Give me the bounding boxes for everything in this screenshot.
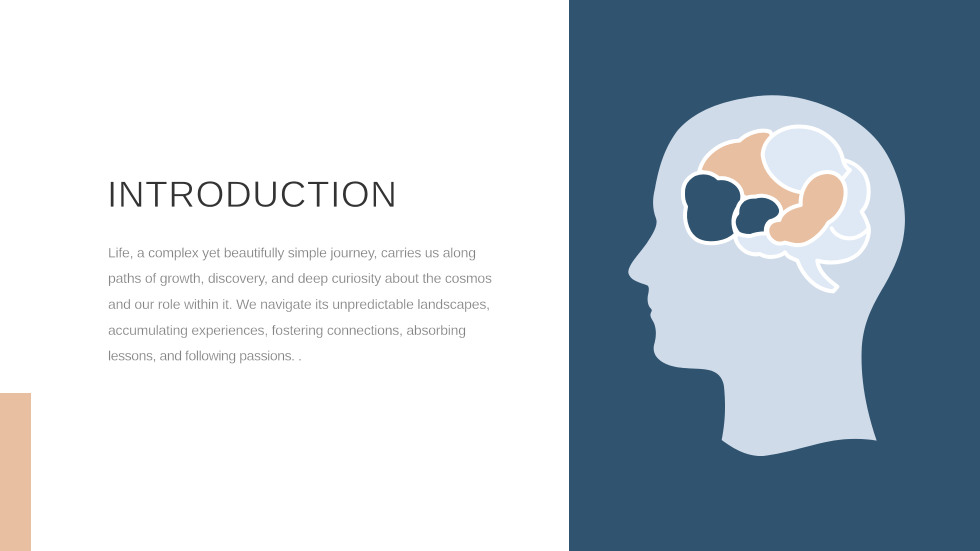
brain dark small lobe bbox=[734, 196, 781, 236]
accent bar bbox=[0, 393, 31, 551]
head silhouette bbox=[628, 95, 905, 456]
brain dark front lobe bbox=[683, 172, 742, 243]
brain top light lobe bbox=[763, 127, 850, 192]
illustration: head with brain bbox=[628, 95, 905, 456]
body text: Life, a complex yet beautifully simple journey, carries us along bbox=[108, 244, 476, 260]
brain peach lobe bbox=[699, 131, 807, 223]
body text: lessons, and following passions. . bbox=[108, 348, 302, 364]
brain lower right lobe line bbox=[832, 228, 867, 238]
body text: paths of growth, discovery, and deep curiosity about the cosmos bbox=[108, 270, 492, 286]
title: INTRODUCTION bbox=[107, 174, 397, 215]
brain base bbox=[735, 160, 869, 291]
body text: and our role within it. We navigate its unpredictable landscapes, bbox=[108, 296, 490, 312]
body text: accumulating experiences, fostering connections, absorbing bbox=[108, 322, 466, 338]
panel: dark blue background bbox=[569, 0, 980, 551]
brain peach right lobe bbox=[767, 172, 846, 245]
body text bbox=[108, 244, 492, 364]
